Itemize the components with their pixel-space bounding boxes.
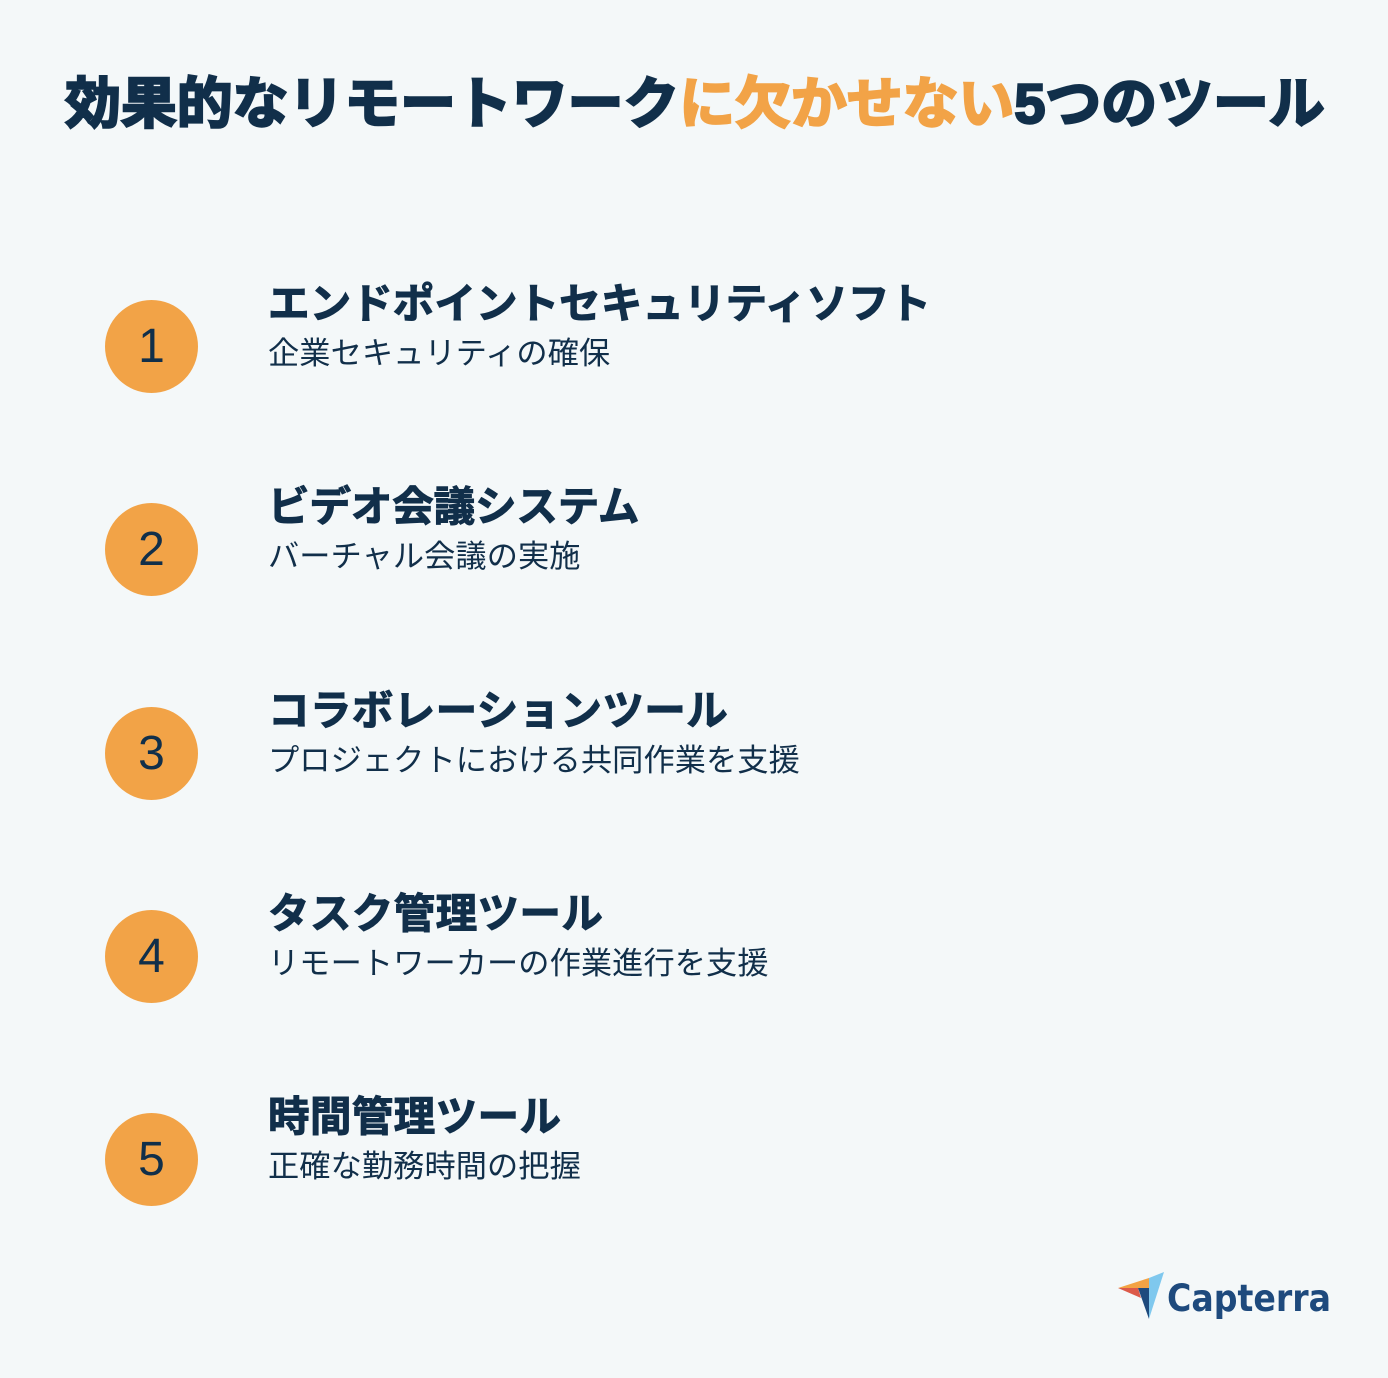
item 2: video conferencing (105, 483, 639, 596)
Capterra logo (1118, 1272, 1331, 1320)
heading 3: コラボレーションツール (268, 687, 728, 734)
number badge 2: 2 (138, 523, 165, 576)
number badge 4: 4 (138, 930, 165, 983)
item 3: collaboration (105, 687, 800, 800)
number badge 5: 5 (138, 1133, 165, 1186)
heading 2: ビデオ会議システム (268, 483, 639, 530)
number badge 2 (105, 503, 198, 596)
item 5: time management (105, 1093, 581, 1206)
description 4: リモートワーカーの作業進行を支援 (268, 946, 769, 980)
heading 5: 時間管理ツール (268, 1093, 561, 1140)
item 1: endpoint security (105, 280, 931, 393)
number badge 3 (105, 707, 198, 800)
heading 4: タスク管理ツール (268, 890, 603, 937)
description 5: 正確な勤務時間の把握 (268, 1148, 581, 1184)
description 2: バーチャル会議の実施 (268, 538, 581, 574)
description 1: 企業セキュリティの確保 (268, 336, 610, 370)
number badge 3: 3 (138, 727, 165, 780)
number badge 1 (105, 300, 198, 393)
number badge 4 (105, 910, 198, 1003)
item 4: task management (105, 890, 769, 1003)
number badge 1: 1 (138, 320, 165, 373)
description 3: プロジェクトにおける共同作業を支援 (268, 742, 800, 778)
heading 1: エンドポイントセキュリティソフト (268, 280, 931, 327)
number badge 5 (105, 1113, 198, 1206)
icon: Capterra arrow (1118, 1272, 1164, 1319)
title: 効果的なリモートワークに欠かせない5つのツール (65, 72, 1325, 135)
